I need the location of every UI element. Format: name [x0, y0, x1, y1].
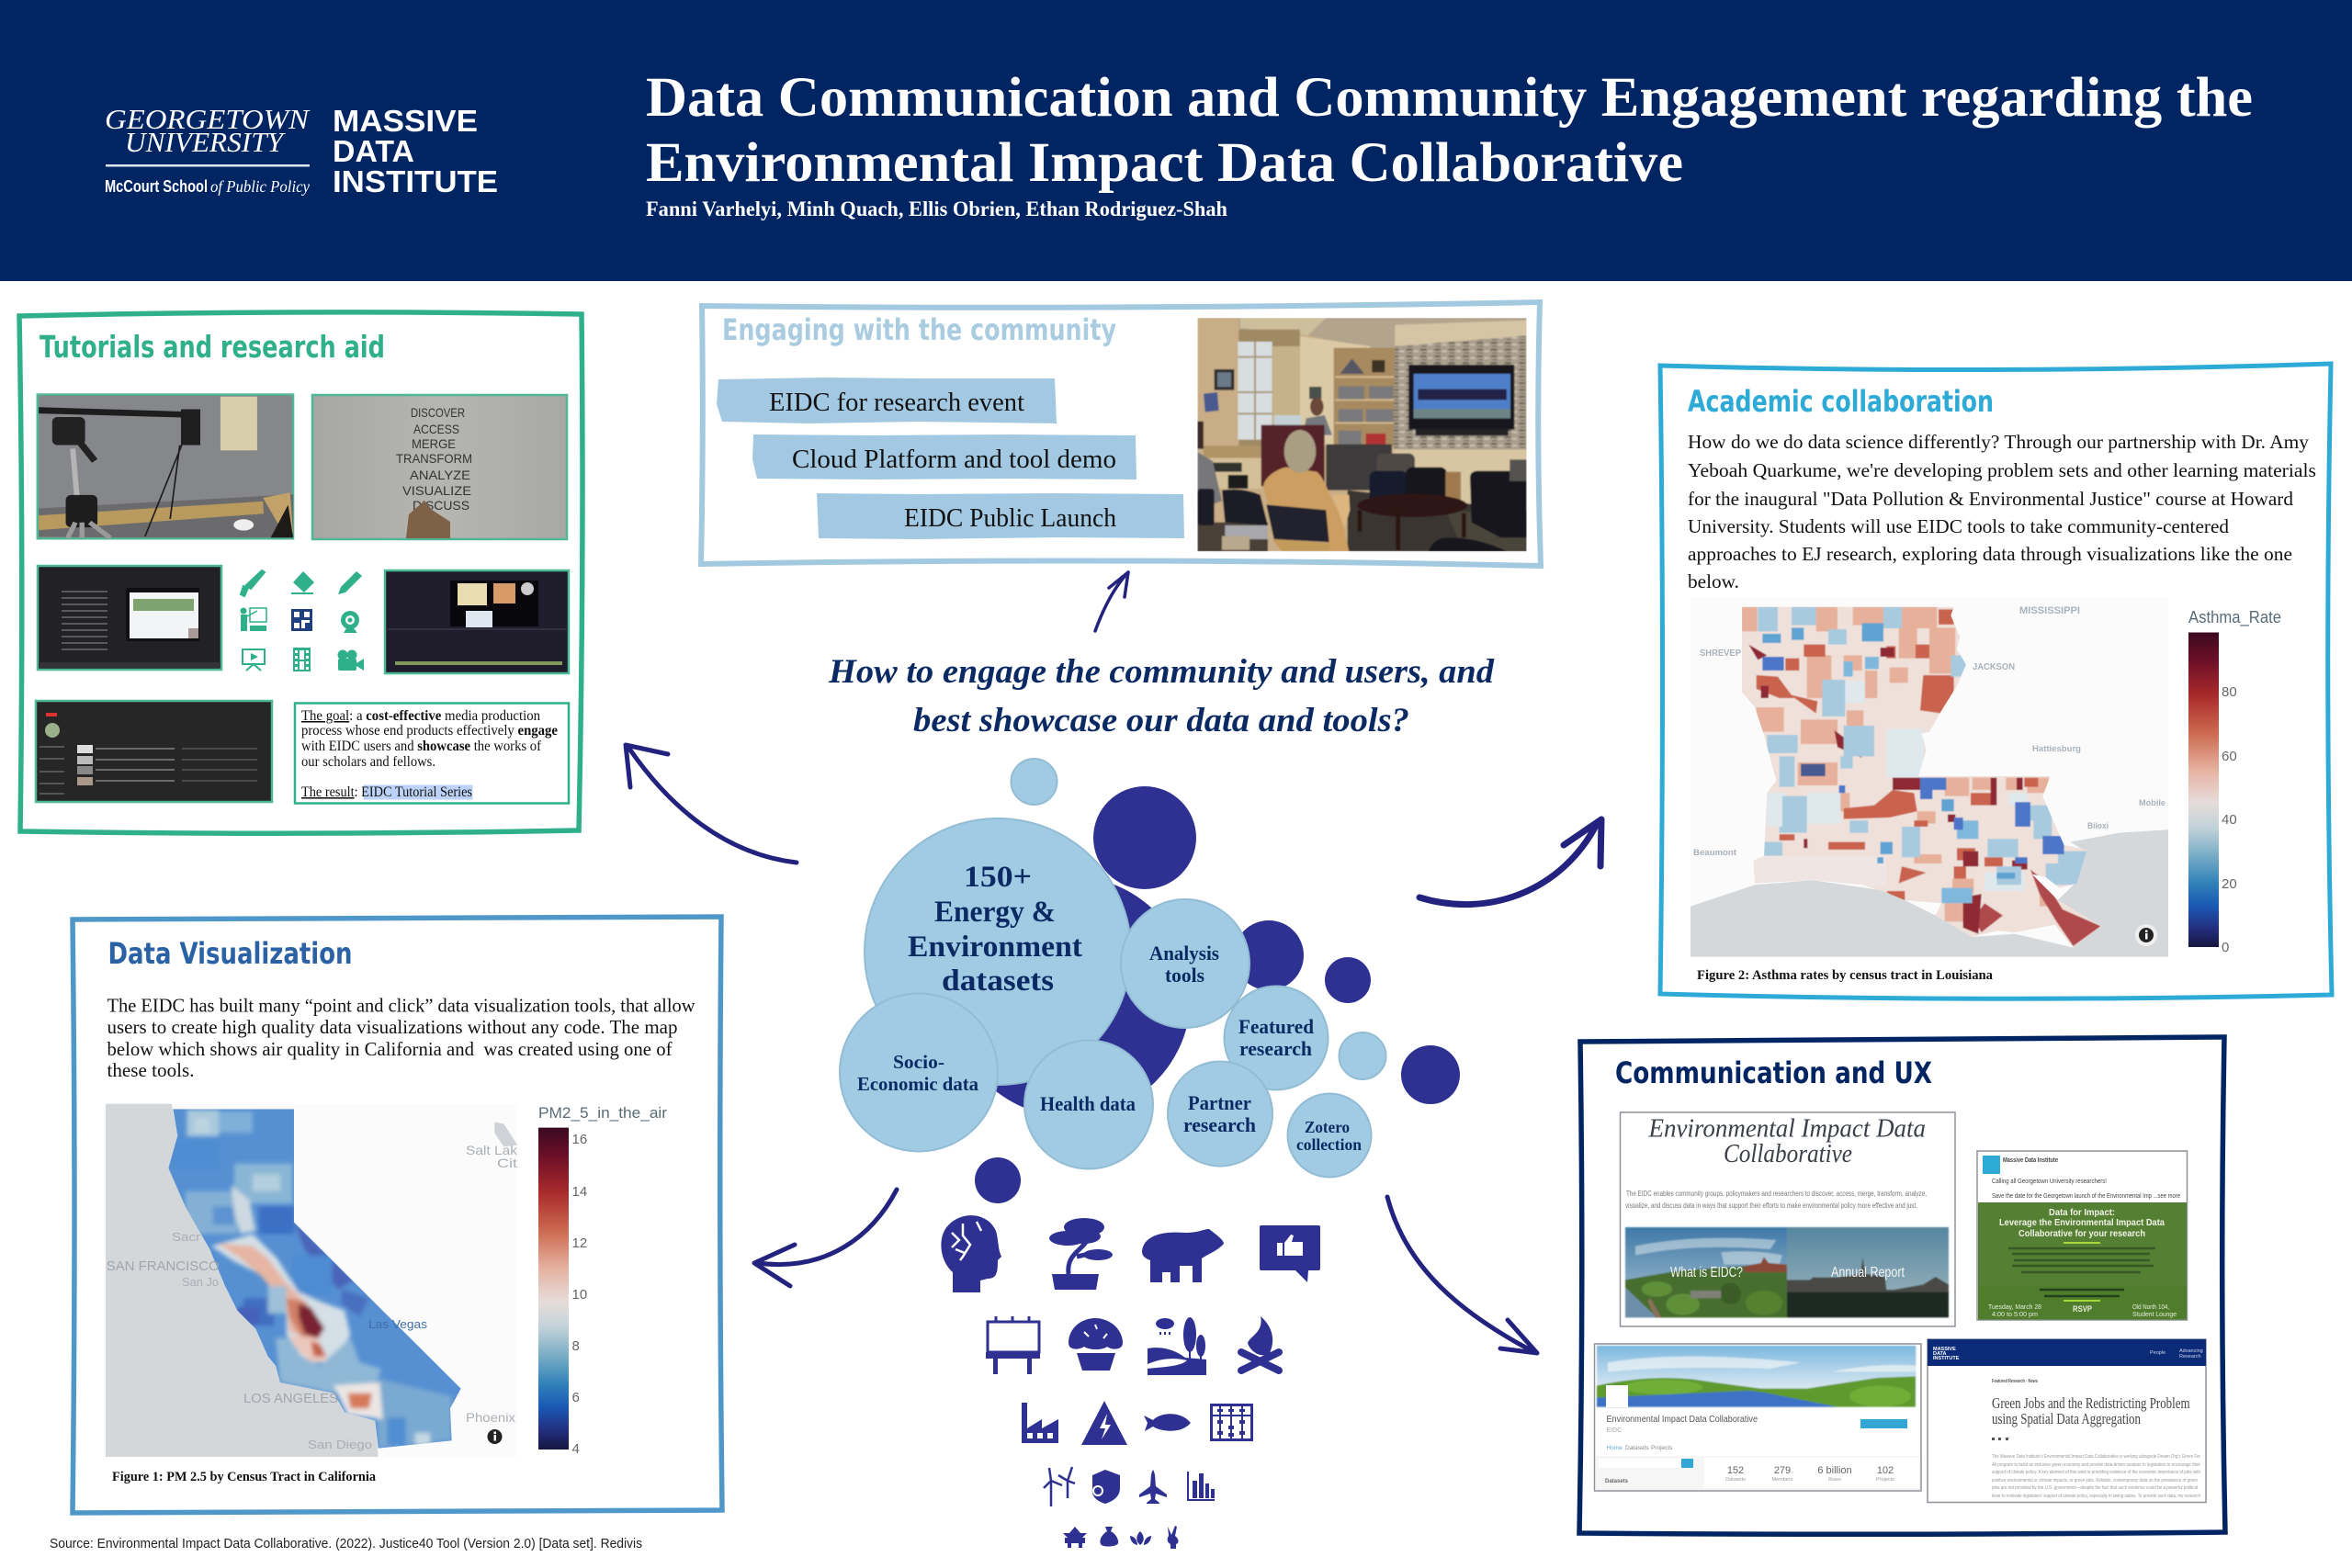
body text: academic: How do we do data science differently? Through our partnership with Dr. Amy	[1688, 431, 2310, 453]
header band	[0, 0, 2352, 281]
map: asthma rates in Louisiana: SHREVEP	[1700, 649, 1741, 659]
screen: video editor script view	[38, 566, 221, 670]
photo: whiteboard tutorial	[312, 395, 567, 539]
bubble: analysis tools	[1121, 899, 1250, 1028]
screen: video timeline editor	[385, 570, 569, 673]
arrow: to communication and UX	[1387, 1197, 1537, 1353]
logo: Georgetown University McCourt School: UNIVERSITY	[125, 126, 286, 158]
screenshot: Redivis EIDC organization page: Datasets	[1605, 1479, 1629, 1484]
screenshot: Redivis EIDC organization page: Projects	[1651, 1445, 1673, 1451]
text box: goal and result	[295, 704, 569, 803]
icon: billboard	[986, 1316, 1040, 1374]
screenshot: MDI green jobs article	[1928, 1339, 2206, 1503]
icon: high voltage triangle	[1081, 1401, 1127, 1445]
icon: virus shield	[1092, 1470, 1120, 1504]
bubble: socio-economic data: Economic data	[857, 1073, 978, 1095]
map: PM 2.5 in California: Salt Lak	[466, 1143, 518, 1157]
legend: PM2.5 colorbar: 4	[571, 1441, 580, 1457]
logo: Massive Data Institute: INSTITUTE	[333, 164, 498, 198]
body text: data visualization: The EIDC has built many “point and click” data visualization tools, that allow	[107, 994, 695, 1016]
screenshot: EIDC landing page: Environmental Impact Data	[1648, 1113, 1926, 1143]
photo: whiteboard tutorial: TRANSFORM	[396, 451, 472, 466]
screenshot: LinkedIn event post: Data for Impact:	[2049, 1208, 2115, 1218]
photo: whiteboard tutorial: ANALYZE	[410, 468, 470, 482]
authors: Fanni Varhelyi, Minh Quach, Ellis Obrien, Ethan Rodriguez-Shah	[646, 197, 1227, 220]
screenshot: LinkedIn event post: Massive Data Institute	[2003, 1157, 2058, 1164]
screenshot: Redivis EIDC organization page: 6 billion	[1817, 1465, 1852, 1476]
map: asthma rates in Louisiana: JACKSON	[1973, 662, 2015, 672]
icon: campfire	[1241, 1316, 1279, 1371]
body text: data visualization: these tools.	[107, 1059, 195, 1081]
logo: Massive Data Institute: DATA	[333, 134, 414, 168]
screenshot: LinkedIn event post: Save the date for the Georgetown launch of the Environmental Imp ...see more	[1992, 1193, 2180, 1200]
central question: best showcase our data and tools?	[913, 702, 1409, 739]
screenshot: Redivis EIDC organization page: Members	[1772, 1477, 1793, 1483]
bubble: socio-economic data: Socio-	[893, 1051, 944, 1073]
map: PM 2.5 in California: Sacr	[172, 1230, 201, 1244]
icon: abacus	[1211, 1405, 1251, 1440]
screenshot: LinkedIn event post: 4:00 to 5:00 pm	[1992, 1310, 2038, 1318]
bubble: 150+ datasets: datasets	[942, 964, 1054, 998]
screenshot: MDI green jobs article: using Spatial Data Aggregation	[1992, 1410, 2141, 1427]
heading: academic: Academic collaboration	[1688, 384, 1994, 419]
text box: goal and result: process whose end products effectively engage	[301, 723, 558, 739]
map: asthma rates in Louisiana: Beaumont	[1693, 848, 1736, 857]
legend: PM2.5 colorbar: PM2_5_in_the_air	[538, 1104, 667, 1122]
caption: figure 2: Figure 2: Asthma rates by census tract in Louisiana	[1697, 968, 1994, 983]
photo: whiteboard tutorial: ACCESS	[413, 422, 459, 436]
logo: Georgetown University McCourt School: GEORGETOWN	[105, 103, 311, 135]
bubble cluster: data resources	[840, 759, 1460, 1203]
bubble: partner research	[1168, 1062, 1272, 1167]
screenshot: Redivis EIDC organization page: EIDC	[1606, 1427, 1622, 1434]
screenshot: LinkedIn event post: Tuesday, March 28	[1988, 1303, 2041, 1311]
screenshot: Redivis EIDC organization page: Home	[1606, 1445, 1623, 1451]
photo: camera on tripod	[38, 394, 293, 538]
panel: data visualization	[73, 917, 722, 1513]
title	[646, 67, 2253, 194]
event bar: research event: EIDC for research event	[769, 389, 1024, 417]
icon: landscape	[1148, 1317, 1206, 1375]
icon: bar chart	[1188, 1472, 1215, 1500]
legend: asthma rate colorbar: 80	[2222, 684, 2237, 700]
icons: media production tools	[241, 570, 364, 671]
icon: fish	[1144, 1414, 1191, 1431]
body text: academic: for the inaugural "Data Pollution & Environmental Justice" course at Howard	[1688, 488, 2293, 510]
legend: asthma rate colorbar: 40	[2222, 812, 2237, 828]
bubble: zotero collection: collection	[1296, 1135, 1362, 1154]
screen: YouTube channel content list	[36, 701, 272, 802]
map: PM 2.5 in California: San Diego	[308, 1438, 372, 1451]
legend: PM2.5 colorbar: 8	[571, 1338, 580, 1354]
icon: brain head	[941, 1215, 1001, 1292]
photo: whiteboard tutorial: DISCOVER	[411, 405, 465, 420]
screenshot: EIDC landing page: Collaborative	[1724, 1139, 1852, 1168]
logo: Massive Data Institute	[333, 104, 498, 198]
screenshot: Redivis EIDC organization page	[1595, 1344, 1921, 1491]
bubble: analysis tools: Analysis	[1149, 942, 1219, 964]
screenshot: Redivis EIDC organization page: Datasets	[1725, 1477, 1746, 1483]
bubble: 150+ datasets: 150+	[964, 861, 1032, 894]
body text: data visualization: below which shows air quality in California and was created using one of	[107, 1038, 673, 1060]
body text: academic	[1688, 431, 2316, 592]
legend: PM2.5 colorbar: 6	[571, 1390, 580, 1405]
event bar: public launch	[817, 493, 1184, 539]
photo: whiteboard tutorial: VISUALIZE	[402, 483, 471, 498]
screenshot: LinkedIn event post: Student Lounge	[2132, 1310, 2177, 1318]
body text: academic: below.	[1688, 570, 1739, 592]
map: PM 2.5 in California: Cit	[497, 1156, 517, 1170]
screenshot: EIDC landing page	[1621, 1112, 1955, 1326]
bubble: socio-economic data	[840, 994, 998, 1152]
icon: factory	[1022, 1403, 1058, 1443]
screenshot: MDI green jobs article: All program to build an inclusive green economy and provide data-driven analysis to legislators to encourage their	[1992, 1462, 2200, 1468]
logo: Georgetown University McCourt School	[105, 103, 311, 196]
screenshot: MDI green jobs article: positive environmental or climate impacts, or green jobs. Reliable, contemporary data on the prevalence of green	[1992, 1478, 2198, 1483]
event bar: research event	[717, 378, 1057, 423]
screenshot: LinkedIn event post: Calling all Georgetown University researchers!	[1992, 1179, 2107, 1185]
title: Environmental Impact Data Collaborative	[646, 132, 1683, 194]
central question	[828, 653, 1495, 739]
icon: muffin	[1069, 1318, 1123, 1371]
text box: goal and result: our scholars and fellows.	[301, 754, 435, 770]
map: asthma rates in Louisiana: Hattiesburg	[2032, 744, 2081, 753]
logo: Georgetown University McCourt School: of Public Policy	[210, 177, 310, 196]
caption: figure 1: Figure 1: PM 2.5 by Census Tract in California	[112, 1470, 377, 1484]
screenshot: MDI green jobs article: jobs are not provided by the U.S. government—despite the fact that such evidence could be a powerful political	[1991, 1485, 2198, 1491]
body text: data visualization	[107, 994, 695, 1081]
screenshot: Redivis EIDC organization page: Projects	[1876, 1477, 1894, 1483]
map: PM 2.5 in California: Phoenix	[466, 1410, 515, 1425]
screenshot: Redivis EIDC organization page: 152	[1727, 1465, 1744, 1476]
screenshot: MDI green jobs article: The Massive Data Institute's Environmental Impact Data Collaborative is working alongside Dream.Org's Green For	[1992, 1454, 2200, 1460]
screenshot: LinkedIn event post: Old North 104,	[2132, 1303, 2169, 1311]
heading: data visualization: Data Visualization	[108, 936, 353, 971]
event bar: public launch: EIDC Public Launch	[904, 504, 1116, 533]
screenshot: EIDC landing page: Annual Report	[1831, 1265, 1905, 1280]
panel: tutorials and research aid	[19, 312, 582, 833]
logo: Massive Data Institute: MASSIVE	[333, 104, 478, 138]
screenshot: Redivis EIDC organization page: 102	[1877, 1465, 1894, 1476]
map: PM 2.5 in California: SAN FRANCISCO	[107, 1258, 220, 1274]
map: asthma rates in Louisiana: Biloxi	[2087, 821, 2109, 830]
photo: whiteboard tutorial: DISCUSS	[413, 498, 469, 513]
bubble: zotero collection: Zotero	[1305, 1118, 1350, 1136]
arrow: to academic collaboration	[1419, 819, 1601, 905]
bubble: 150+ datasets	[865, 818, 1131, 1085]
arrow: to tutorials	[626, 745, 797, 863]
panel: engaging with the community	[701, 302, 1541, 566]
legend: PM2.5 colorbar: 14	[571, 1184, 587, 1200]
body text: academic: University. Students will use EIDC tools to take community-centered	[1688, 515, 2230, 537]
screenshot: MDI green jobs article: lever to motivate legislators' support of climate policy, especially in swing states. To provide such data, my research	[1992, 1494, 2200, 1499]
screenshot: EIDC landing page: What is EIDC?	[1670, 1265, 1743, 1280]
screenshot: EIDC landing page: The EIDC enables community groups, policymakers and researchers to discover, access, merge, transform, analyze,	[1626, 1190, 1927, 1198]
legend: asthma rate colorbar: 60	[2222, 749, 2237, 764]
icon grid: topics	[941, 1215, 1320, 1549]
body text: data visualization: users to create high quality data visualizations without any code. The map	[107, 1016, 678, 1038]
map: PM 2.5 in California	[106, 1104, 518, 1457]
title: Data Communication and Community Engagement regarding the	[646, 67, 2253, 129]
bubble: featured research	[1224, 987, 1329, 1089]
screenshot: MDI green jobs article: DATA	[1933, 1351, 1946, 1357]
bubble: health data	[1024, 1040, 1153, 1168]
screenshot: LinkedIn event post: Collaborative for your research	[2018, 1229, 2145, 1239]
screenshot: MDI green jobs article: support of climate policy. A key element of this work is providing evidence of the economic importance of jobs with	[1992, 1470, 2200, 1475]
icon: lotus	[1130, 1531, 1151, 1545]
screenshot: Redivis EIDC organization page: 279	[1774, 1465, 1791, 1476]
bubble: partner research: Partner	[1188, 1091, 1251, 1114]
event bar: tool demo: Cloud Platform and tool demo	[792, 446, 1116, 474]
body text: academic: approaches to EJ research, exploring data through visualizations like the one	[1688, 543, 2292, 565]
bubble: analysis tools: tools	[1165, 964, 1204, 987]
logo: Georgetown University McCourt School: McCourt School	[105, 177, 208, 196]
panel: communication and UX	[1579, 1037, 2225, 1534]
arrow: up to community	[1095, 572, 1128, 631]
map: asthma rates in Louisiana	[1690, 597, 2168, 957]
photo: community event room	[1197, 318, 1527, 551]
screenshot: Redivis EIDC organization page: Rows	[1828, 1477, 1841, 1483]
map: PM 2.5 in California: Las Vegas	[368, 1317, 428, 1331]
text box: goal and result: with EIDC users and showcase the works of	[301, 739, 542, 754]
screenshot: MDI green jobs article: INSTITUTE	[1933, 1356, 1960, 1361]
legend: PM2.5 colorbar	[538, 1104, 667, 1457]
icon: wind turbines	[1044, 1467, 1075, 1506]
map: asthma rates in Louisiana: MISSISSIPPI	[2019, 605, 2080, 616]
screenshot: EIDC landing page: visualize, and discuss data in ways that support their efforts to make environmental policy more effective and just.	[1625, 1201, 1917, 1210]
photo: whiteboard tutorial: MERGE	[412, 436, 456, 451]
screenshot: MDI green jobs article: Featured Research · News	[1992, 1379, 2038, 1384]
legend: asthma rate colorbar: Asthma_Rate	[2188, 608, 2281, 627]
heading: tutorials: Tutorials and research aid	[40, 329, 385, 365]
heading: engaging: Engaging with the community	[722, 312, 1116, 347]
legend: PM2.5 colorbar: 12	[571, 1235, 587, 1251]
icon: peace hand	[1168, 1526, 1179, 1549]
screenshot: MDI green jobs article: People	[2150, 1350, 2165, 1356]
screenshot: MDI green jobs article: MASSIVE	[1933, 1347, 1956, 1352]
text box: goal and result: The result: EIDC Tutorial Series	[301, 784, 472, 800]
screenshot: Redivis EIDC organization page: Datasets	[1625, 1445, 1649, 1451]
legend: PM2.5 colorbar: 10	[571, 1287, 587, 1303]
legend: PM2.5 colorbar: 16	[571, 1132, 587, 1147]
map: PM 2.5 in California: San Jo	[182, 1275, 219, 1289]
heading: communication and UX: Communication and UX	[1615, 1055, 1932, 1090]
icon: bear	[1142, 1229, 1224, 1282]
bubble: health data: Health data	[1040, 1092, 1136, 1115]
screenshot: LinkedIn event post: Leverage the Environmental Impact Data	[1999, 1218, 2165, 1228]
bubble: featured research: research	[1239, 1037, 1312, 1060]
icon: thumbs up speech bubble	[1260, 1225, 1320, 1282]
bubble: featured research: Featured	[1238, 1015, 1314, 1038]
screenshot: LinkedIn event post: RSVP	[2073, 1304, 2092, 1314]
icon: pagoda	[1063, 1527, 1087, 1548]
central question: How to engage the community and users, and	[828, 653, 1495, 691]
legend: asthma rate colorbar: 0	[2222, 940, 2229, 955]
source note: Source: Environmental Impact Data Collaborative. (2022). Justice40 Tool (Version 2.0) [Data set]. Redivis	[50, 1537, 642, 1551]
screenshot: MDI green jobs article: Advancing	[2179, 1348, 2203, 1354]
legend: asthma rate colorbar	[2188, 608, 2281, 955]
bubble: 150+ datasets: Energy &	[934, 896, 1056, 929]
bubble: zotero collection	[1288, 1093, 1371, 1178]
bubble: 150+ datasets: Environment	[908, 931, 1082, 964]
text box: goal and result: The goal: a cost-effective media production	[301, 708, 540, 724]
legend: asthma rate colorbar: 20	[2222, 876, 2237, 892]
screenshot: LinkedIn event post	[1977, 1151, 2187, 1320]
map: asthma rates in Louisiana: Mobile	[2139, 798, 2165, 807]
bubble: partner research: research	[1183, 1113, 1256, 1136]
screenshot: MDI green jobs article: Green Jobs and the Redistricting Problem	[1992, 1394, 2190, 1412]
icon: money bag	[1100, 1527, 1118, 1547]
body text: academic: Yeboah Quarkume, we're developing problem sets and other learning materials	[1688, 459, 2316, 481]
screenshot: Redivis EIDC organization page: Environmental Impact Data Collaborative	[1606, 1415, 1758, 1425]
map: PM 2.5 in California: LOS ANGELES	[243, 1391, 338, 1406]
icon: airplane	[1139, 1470, 1167, 1504]
icon: bonsai	[1049, 1218, 1113, 1290]
panel: academic collaboration	[1660, 364, 2332, 998]
event bar: tool demo	[752, 434, 1136, 479]
arrow: to data visualization	[754, 1190, 897, 1286]
screenshot: MDI green jobs article: Research	[2179, 1354, 2201, 1359]
